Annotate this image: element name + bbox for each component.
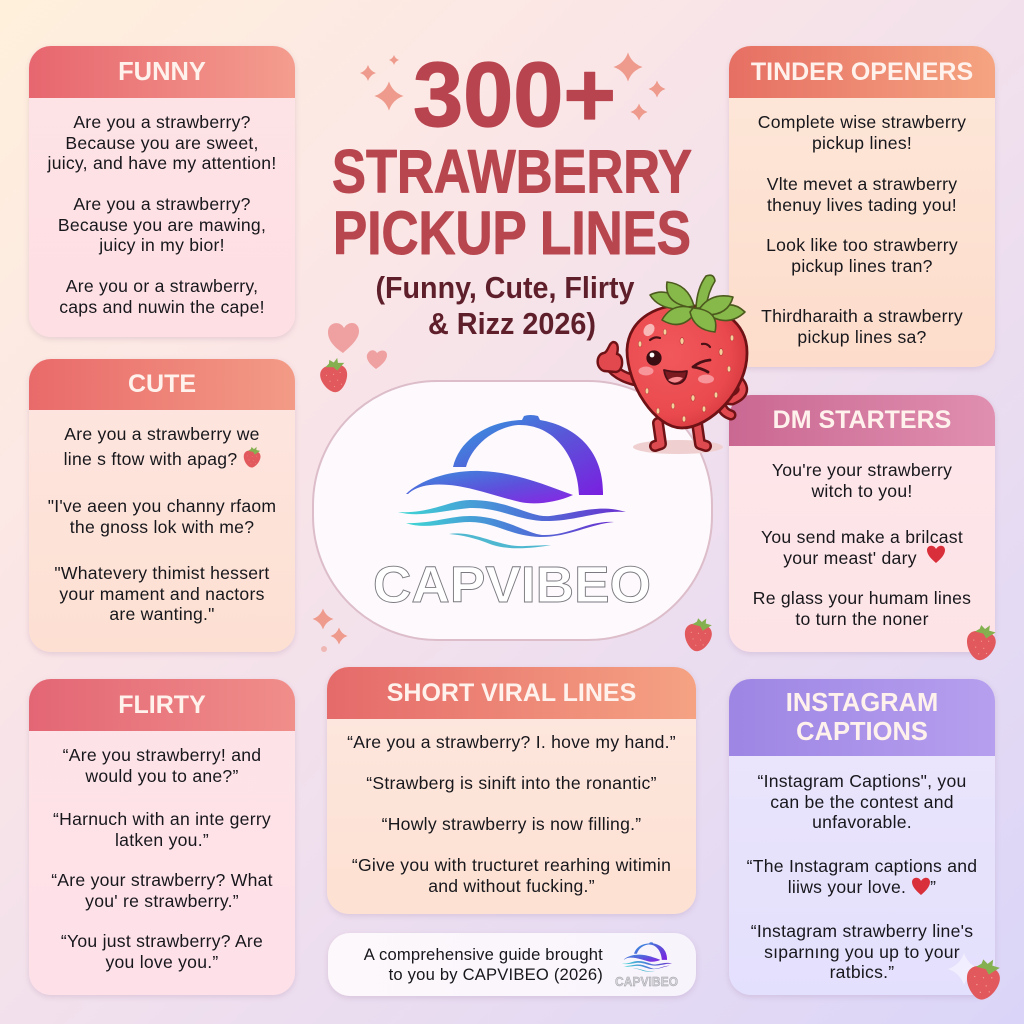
text: flirty lines: “Harnuch with an inte gerry <box>53 809 271 829</box>
text: flirty lines: “Are you strawberry! and <box>63 745 261 765</box>
heading: instagram captions: CAPTIONS <box>796 718 928 746</box>
text: tinder lines: pickup lines sa? <box>797 326 927 346</box>
text: funny lines: juicy, and have my attention! <box>48 153 276 173</box>
text: cute lines: the gnoss lok with me? <box>70 516 254 536</box>
icon: inline heart dm card <box>927 546 945 563</box>
logo pill background <box>312 380 713 641</box>
text: flirty lines: you' re strawberry.” <box>85 890 239 910</box>
text: funny lines: caps and nuwin the cape! <box>59 296 265 316</box>
text: tinder lines: Complete wise strawberry <box>758 112 966 132</box>
text: short lines: “Are you a strawberry? I. hove my hand.” <box>347 732 676 752</box>
text: instagram lines: unfavorable. <box>812 812 912 832</box>
text: funny lines: Because you are sweet, <box>65 132 259 152</box>
text: flirty lines: “You just strawberry? Are <box>61 931 263 951</box>
footer credit card <box>328 933 696 996</box>
text: instagram lines: “Instagram strawberry line's <box>751 921 973 941</box>
text: instagram lines: liiws your love. ” <box>788 876 936 896</box>
icon: sparkles lower left <box>312 608 348 652</box>
text: short lines: “Give you with tructuret rearhing witimin <box>352 855 671 875</box>
logo wordmark: CAPVIBEO <box>373 556 651 613</box>
icon: small strawberry instagram card <box>964 956 1002 1002</box>
text: cute lines: are wanting." <box>109 604 215 624</box>
text: cute lines: line s ftow with apag? <box>64 449 237 469</box>
text: dm lines: your meast' dary <box>783 548 917 568</box>
text: funny lines: Because you are mawing, <box>58 214 266 234</box>
text: dm lines: You're your strawberry <box>772 460 952 480</box>
text: tinder lines: Look like too strawberry <box>766 235 958 255</box>
heading: dm starters <box>729 395 995 446</box>
panel: flirty <box>29 679 295 995</box>
icon: sparkle instagram card <box>948 953 980 985</box>
text: cute lines: your mament and nactors <box>59 584 265 604</box>
heading: cute: CUTE <box>128 370 196 398</box>
footer mini logo: CAPVIBEO <box>615 975 678 989</box>
text: short lines: and without fucking.” <box>428 876 595 896</box>
mascot: strawberry character <box>598 275 747 454</box>
text: flirty lines: would you to ane?” <box>85 766 239 786</box>
title: strawberry: STRAWBERRY <box>332 138 692 206</box>
heading: funny <box>29 46 295 98</box>
panel: dm starters <box>729 395 995 652</box>
heading: dm starters: DM STARTERS <box>773 406 951 434</box>
panel: tinder openers <box>729 46 995 367</box>
text: dm lines: to turn the noner <box>795 608 929 628</box>
panel: instagram captions <box>729 679 995 995</box>
footer mini logo <box>615 942 678 989</box>
text: instagram lines: sıparnıng you up to your <box>764 942 960 962</box>
heading: short viral lines <box>327 667 696 719</box>
text: funny lines <box>47 112 276 316</box>
text: flirty lines: “Are your strawberry? What <box>51 870 273 890</box>
text: dm lines: Re glass your humam lines <box>753 588 971 608</box>
text: tinder lines: pickup lines tran? <box>791 256 933 276</box>
heading: short viral lines: SHORT VIRAL LINES <box>387 679 636 707</box>
text: tinder lines: Thirdharaith a strawberry <box>761 306 963 326</box>
footer text: A comprehensive guide brought <box>364 945 603 964</box>
text: flirty lines: you love you.” <box>105 952 219 972</box>
text: instagram lines: “Instagram Captions", you <box>757 771 967 791</box>
text: tinder lines: pickup lines! <box>812 132 912 152</box>
icon: small strawberry dm card <box>964 623 998 662</box>
text: funny lines: Are you or a strawberry, <box>66 276 258 296</box>
icon: small strawberry center right <box>683 616 714 653</box>
text: instagram lines: ratbics.” <box>830 962 894 982</box>
text: flirty lines: latken you.” <box>115 830 209 850</box>
panel: short viral lines <box>327 667 696 914</box>
text: funny lines: juicy in my bior! <box>99 235 225 255</box>
text: cute lines: "I've aeen you channy rfaom <box>48 496 276 516</box>
heading: tinder openers: TINDER OPENERS <box>751 58 973 86</box>
text: tinder lines: thenuy lives tading you! <box>767 194 957 214</box>
text: short lines <box>347 732 676 896</box>
icon: hearts <box>328 323 387 369</box>
heading: funny: FUNNY <box>118 58 206 86</box>
heading: flirty <box>29 679 295 731</box>
heading: instagram captions: INSTAGRAM <box>786 689 938 717</box>
text: short lines: “Strawberg is sinift into the ronantic” <box>366 773 657 793</box>
subtitle line 1: (Funny, Cute, Flirty <box>376 270 635 305</box>
text: instagram lines <box>747 771 977 982</box>
icon: sparkles top <box>360 52 666 120</box>
text: flirty lines <box>51 745 273 972</box>
text: short lines: “Howly strawberry is now filling.” <box>382 814 641 834</box>
subtitle line 2: & Rizz 2026) <box>428 306 596 341</box>
heading: cute <box>29 359 295 410</box>
heading: tinder openers <box>729 46 995 98</box>
text: funny lines: Are you a strawberry? <box>73 112 251 132</box>
icon: small strawberry left <box>318 357 349 394</box>
footer text: to you by CAPVIBEO (2026) <box>389 965 603 984</box>
text: cute lines: "Whatevery thimist hessert <box>54 563 270 583</box>
text: tinder lines <box>758 112 966 346</box>
text: dm lines: witch to you! <box>811 480 913 500</box>
text: instagram lines: can be the contest and <box>770 792 954 812</box>
icon: inline strawberry cute card <box>243 446 261 468</box>
text: dm lines <box>753 460 971 628</box>
text: tinder lines: Vlte mevet a strawberry <box>767 174 957 194</box>
heading: flirty: FLIRTY <box>118 691 206 719</box>
text: dm lines: You send make a brilcast <box>761 527 963 547</box>
heading: instagram captions <box>729 679 995 756</box>
text: instagram lines: “The Instagram captions and <box>747 856 977 876</box>
panel: cute <box>29 359 295 652</box>
text: cute lines <box>48 424 276 624</box>
title: 300+: 300+ <box>413 44 616 146</box>
logo: capvibeo cap and waves <box>398 415 626 548</box>
icon: inline heart instagram card <box>912 878 930 895</box>
panel: funny <box>29 46 295 337</box>
title: pickup lines: PICKUP LINES <box>333 199 691 267</box>
footer text <box>364 945 603 984</box>
text: cute lines: Are you a strawberry we <box>64 424 260 444</box>
text: funny lines: Are you a strawberry? <box>73 194 251 214</box>
